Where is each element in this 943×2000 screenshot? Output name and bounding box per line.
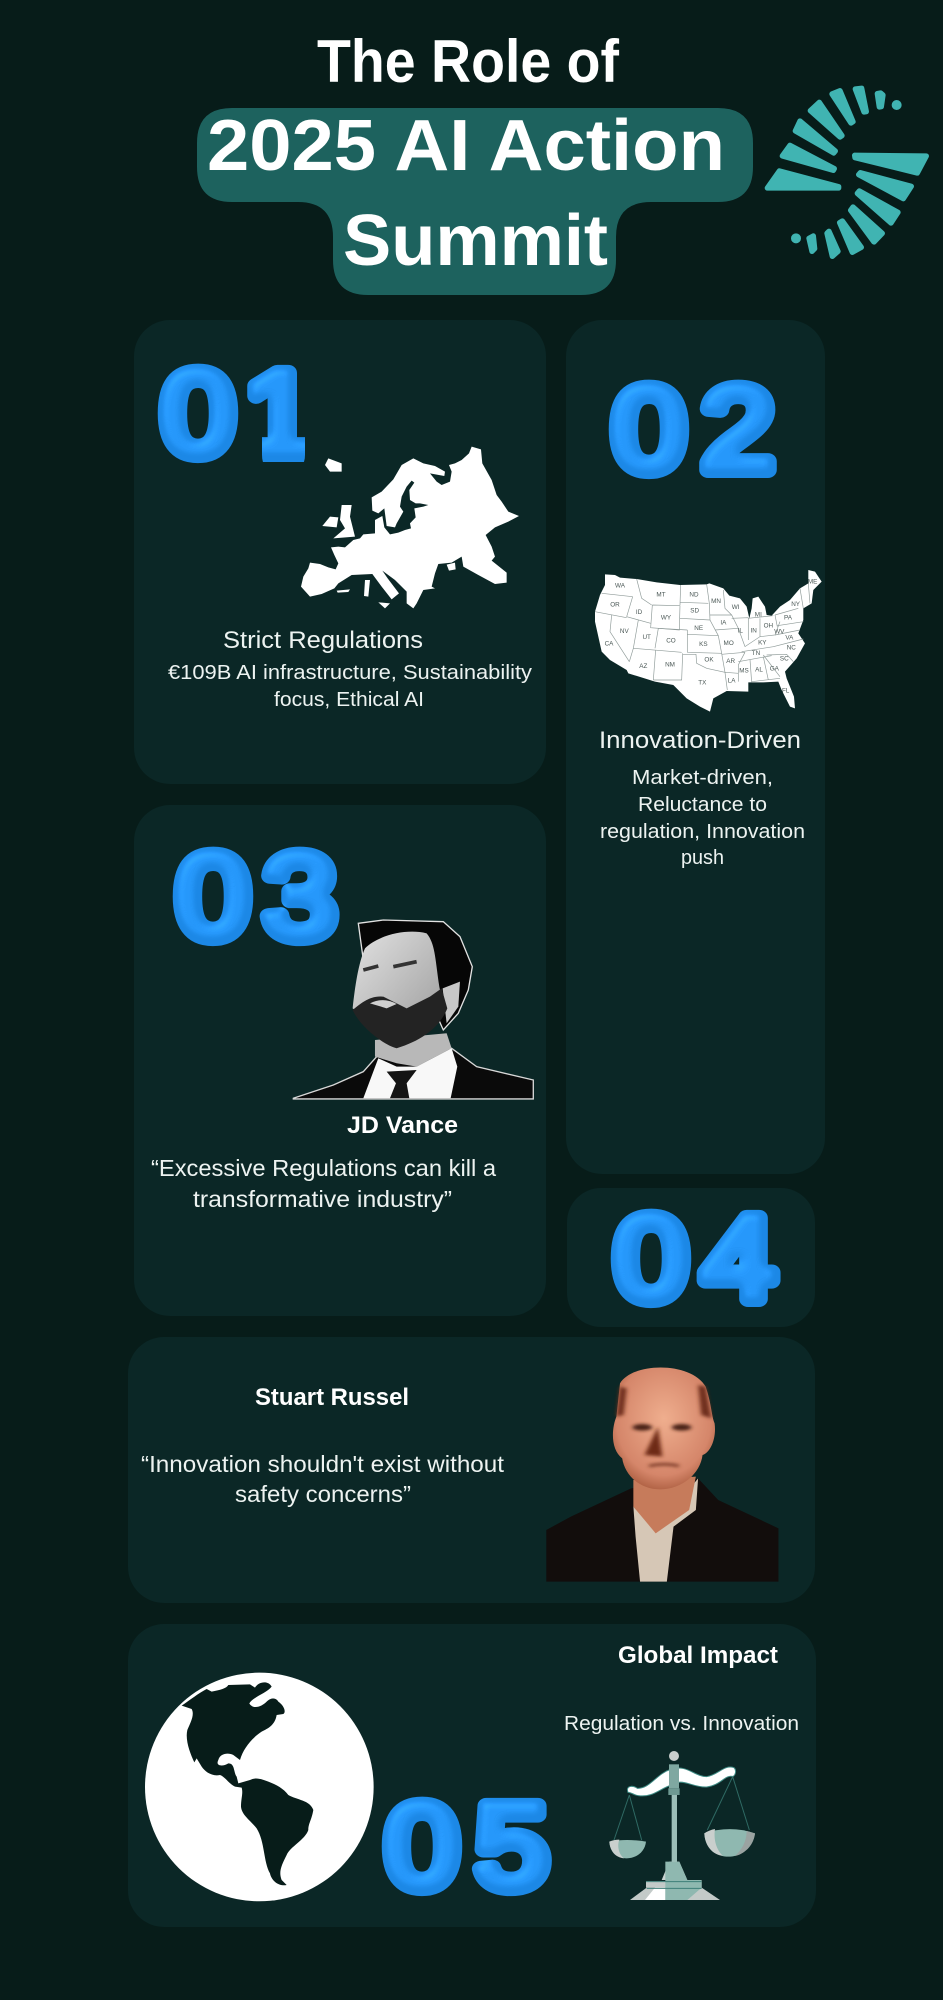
panel: 05 Global Impact <box>128 1624 816 1927</box>
icon: map of the United States: KS <box>699 641 708 648</box>
text: United States description: Reluctance to <box>638 794 767 816</box>
quote: Stuart Russel: “Innovation shouldn't exist without <box>141 1451 505 1477</box>
number 03 <box>176 831 336 963</box>
number 03: 3 <box>264 831 336 963</box>
number 04: 0 <box>614 1193 688 1325</box>
number 03: 0 <box>176 831 250 963</box>
heading: Innovation-Driven: Innovation-Driven <box>599 727 801 754</box>
icon: map of the United States: SC <box>780 656 789 663</box>
quote: JD Vance: transformative industry” <box>193 1186 452 1212</box>
icon: map of the United States: IL <box>738 627 743 634</box>
title line 1: The Role of <box>317 28 620 95</box>
icon: map of the United States: KY <box>758 639 767 646</box>
text: United States description: Market-driven, <box>632 767 773 789</box>
icon: map of the United States: MO <box>724 640 734 647</box>
number 01 <box>158 364 305 464</box>
icon: summit logo <box>767 88 926 256</box>
icon: map of the United States: SD <box>690 607 699 614</box>
number 01: 0 <box>162 348 234 480</box>
text: Europe description: focus, Ethical AI <box>274 689 424 711</box>
icon: map of the United States: OH <box>764 622 773 629</box>
icon: map of the United States: NM <box>665 662 675 669</box>
icon: map of the United States: UT <box>642 634 651 641</box>
icon: map of the United States: MN <box>711 598 721 605</box>
icon: map of the United States: AZ <box>639 663 648 670</box>
title pill background <box>197 108 753 295</box>
icon: map of the United States: AR <box>726 658 735 665</box>
panel: 03 JD Vance <box>134 805 546 1316</box>
panel 04 background <box>567 1188 815 1327</box>
panel 01 background <box>134 320 546 784</box>
icon: map of the United States: AL <box>755 667 763 674</box>
title line 2: 2025 AI Action <box>207 106 725 186</box>
portrait: JD Vance <box>293 920 533 1099</box>
panel 05 background <box>128 1624 816 1927</box>
quote: Stuart Russel: safety concerns” <box>235 1481 411 1507</box>
icon: map of the United States: ME <box>808 578 817 585</box>
icon: map of the United States: TN <box>752 650 761 657</box>
icon: globe <box>145 1673 374 1901</box>
name: JD Vance: JD Vance <box>347 1112 458 1139</box>
number 01: 1 <box>244 348 316 480</box>
icon: map of the United States: NY <box>791 601 801 608</box>
text: Europe description <box>168 662 532 711</box>
panel 02 background <box>566 320 825 1174</box>
icon: map of the United States: IA <box>720 620 727 627</box>
panel: 04 <box>567 1188 815 1327</box>
quote: JD Vance <box>151 1155 496 1212</box>
title <box>197 28 753 295</box>
quote: JD Vance: “Excessive Regulations can kill a <box>151 1155 496 1181</box>
text: Regulation vs. Innovation: Regulation vs. Innovation <box>564 1713 799 1735</box>
icon: map of the United States: CA <box>605 641 614 648</box>
icon: map of the United States: WV <box>774 628 785 635</box>
icon: map of the United States: NV <box>620 628 630 635</box>
name: Stuart Russel: Stuart Russel <box>255 1384 409 1411</box>
icon: map of the United States: CO <box>666 638 676 645</box>
text: United States description: regulation, Innovation <box>600 821 805 843</box>
icon: map of Europe <box>301 447 519 608</box>
icon: map of the United States: ID <box>636 609 643 616</box>
panel: Stuart Russel <box>128 1337 815 1603</box>
icon: balance scales <box>609 1751 755 1900</box>
icon: map of the United States: MI <box>755 611 762 618</box>
icon: map of the United States: NE <box>694 625 703 632</box>
panel background <box>128 1337 815 1603</box>
number 05: 5 <box>476 1781 548 1913</box>
portrait: Stuart Russel <box>546 1367 778 1582</box>
icon: map of the United States: TX <box>698 679 707 686</box>
icon: map of the United States: ND <box>689 592 699 599</box>
icon: map of the United States: MT <box>656 592 666 599</box>
icon: map of the United States: FL <box>782 688 790 695</box>
number 04: 4 <box>702 1193 776 1325</box>
icon: map of the United States: WI <box>732 604 740 611</box>
number 02: 2 <box>702 364 774 496</box>
title line 3: Summit <box>343 201 608 281</box>
text: United States description: push <box>681 847 724 869</box>
icon: map of the United States: OK <box>704 656 714 663</box>
panel: 01 Europe <box>134 320 546 784</box>
heading: Global Impact: Global Impact <box>618 1642 778 1669</box>
icon: map of the United States: GA <box>770 665 780 672</box>
icon: map of the United States: OR <box>610 601 620 608</box>
icon: map of the United States: WA <box>615 582 626 589</box>
number 02: 0 <box>612 364 686 496</box>
text: Europe description: €109B AI infrastructure, Sustainability <box>168 662 532 684</box>
icon: map of the United States: PA <box>784 615 793 622</box>
number 04 <box>614 1193 776 1325</box>
icon: map of the United States: NC <box>787 645 796 652</box>
panel 03 background <box>134 805 546 1316</box>
number 05 <box>386 1781 548 1913</box>
panel: 02 United States <box>566 320 825 1174</box>
number 05: 0 <box>386 1781 458 1913</box>
icon: map of the United States: VA <box>785 634 794 641</box>
heading: Strict Regulations: Strict Regulations <box>223 627 423 654</box>
icon: map of the United States: IN <box>750 627 757 634</box>
icon: map of the United States <box>595 570 822 712</box>
icon: map of the United States: MS <box>739 668 749 675</box>
number 02 <box>612 364 774 496</box>
text: United States description <box>600 767 805 869</box>
quote: Stuart Russel <box>141 1451 505 1507</box>
icon: map of the United States: WY <box>661 614 672 621</box>
icon: map of the United States: LA <box>728 677 736 684</box>
